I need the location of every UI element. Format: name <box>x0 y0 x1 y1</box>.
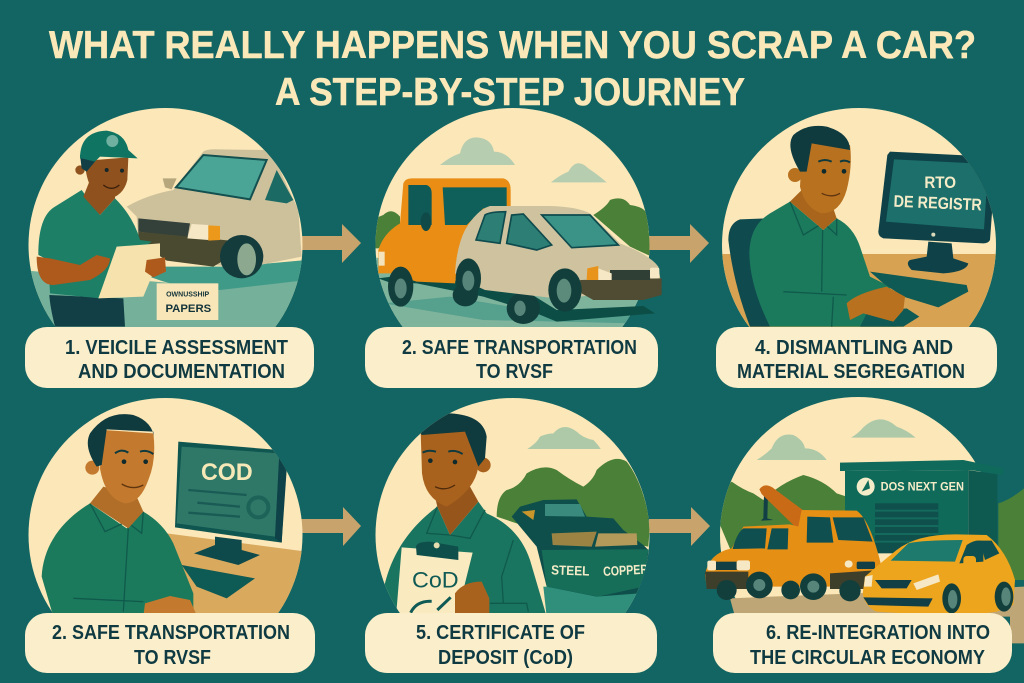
panel: step 4 illustration <box>28 398 302 613</box>
title: WHAT REALLY HAPPENS WHEN YOU SCRAP A CAR? <box>49 24 976 67</box>
label 6 <box>713 613 1012 673</box>
damaged car <box>127 149 302 278</box>
ownership papers sign <box>157 283 218 320</box>
label 4 <box>25 613 315 673</box>
label 3: 4. DISMANTLING AND <box>755 337 953 359</box>
building <box>840 460 1003 553</box>
label 4: TO RVSF <box>134 647 211 669</box>
label 1 <box>25 327 314 388</box>
bins: COPPER <box>603 562 649 579</box>
title: A STEP-BY-STEP JOURNEY <box>275 71 745 114</box>
label 2 <box>365 327 658 388</box>
arrow 3 <box>300 507 361 546</box>
arrow 4 <box>649 507 710 546</box>
tow truck <box>705 485 881 601</box>
monitor COD: COD <box>201 459 253 486</box>
bins: STEEL <box>551 562 590 579</box>
panel: step 5 illustration <box>376 398 650 613</box>
tow truck and beige car <box>378 178 662 324</box>
man <box>42 414 197 617</box>
man <box>381 413 547 617</box>
monitor COD <box>175 442 287 598</box>
panel: step 1 illustration <box>28 108 302 327</box>
ownership papers sign: OWNUSSHIP <box>166 292 210 299</box>
arrow 2 <box>648 224 709 263</box>
label 1: 1. VEICILE ASSESSMENT <box>65 337 288 359</box>
ownership papers sign: PAPERS <box>165 303 212 315</box>
clipboard CoD: CoD <box>412 567 459 592</box>
clipboard CoD <box>396 542 489 617</box>
man <box>749 126 897 327</box>
label 5 <box>365 613 657 673</box>
monitor RTO: RTO <box>924 173 956 192</box>
orange car <box>863 534 1015 617</box>
label 3: MATERIAL SEGREGATION <box>737 361 965 383</box>
panel: step 3 illustration <box>722 108 996 327</box>
bins <box>512 499 649 597</box>
title <box>49 24 976 114</box>
monitor RTO: DE REGISTR <box>893 192 982 215</box>
monitor RTO <box>847 152 996 327</box>
label 2: 2. SAFE TRANSPORTATION <box>402 337 637 359</box>
label 5: 5. CERTIFICATE OF <box>416 622 585 644</box>
label 6: 6. RE-INTEGRATION INTO <box>766 622 990 644</box>
worker <box>37 131 166 327</box>
label 6: THE CIRCULAR ECONOMY <box>750 647 986 669</box>
panel: step 2 illustration <box>376 108 662 327</box>
label 1: AND DOCUMENTATION <box>78 361 285 383</box>
label 3 <box>716 327 997 388</box>
arrow 1 <box>300 224 361 263</box>
label 2: TO RVSF <box>476 361 553 383</box>
panel: step 6 illustration <box>705 397 1024 644</box>
label 5: DEPOSIT (CoD) <box>438 647 573 669</box>
building: DOS NEXT GEN <box>881 480 964 494</box>
label 4: 2. SAFE TRANSPORTATION <box>52 622 290 644</box>
